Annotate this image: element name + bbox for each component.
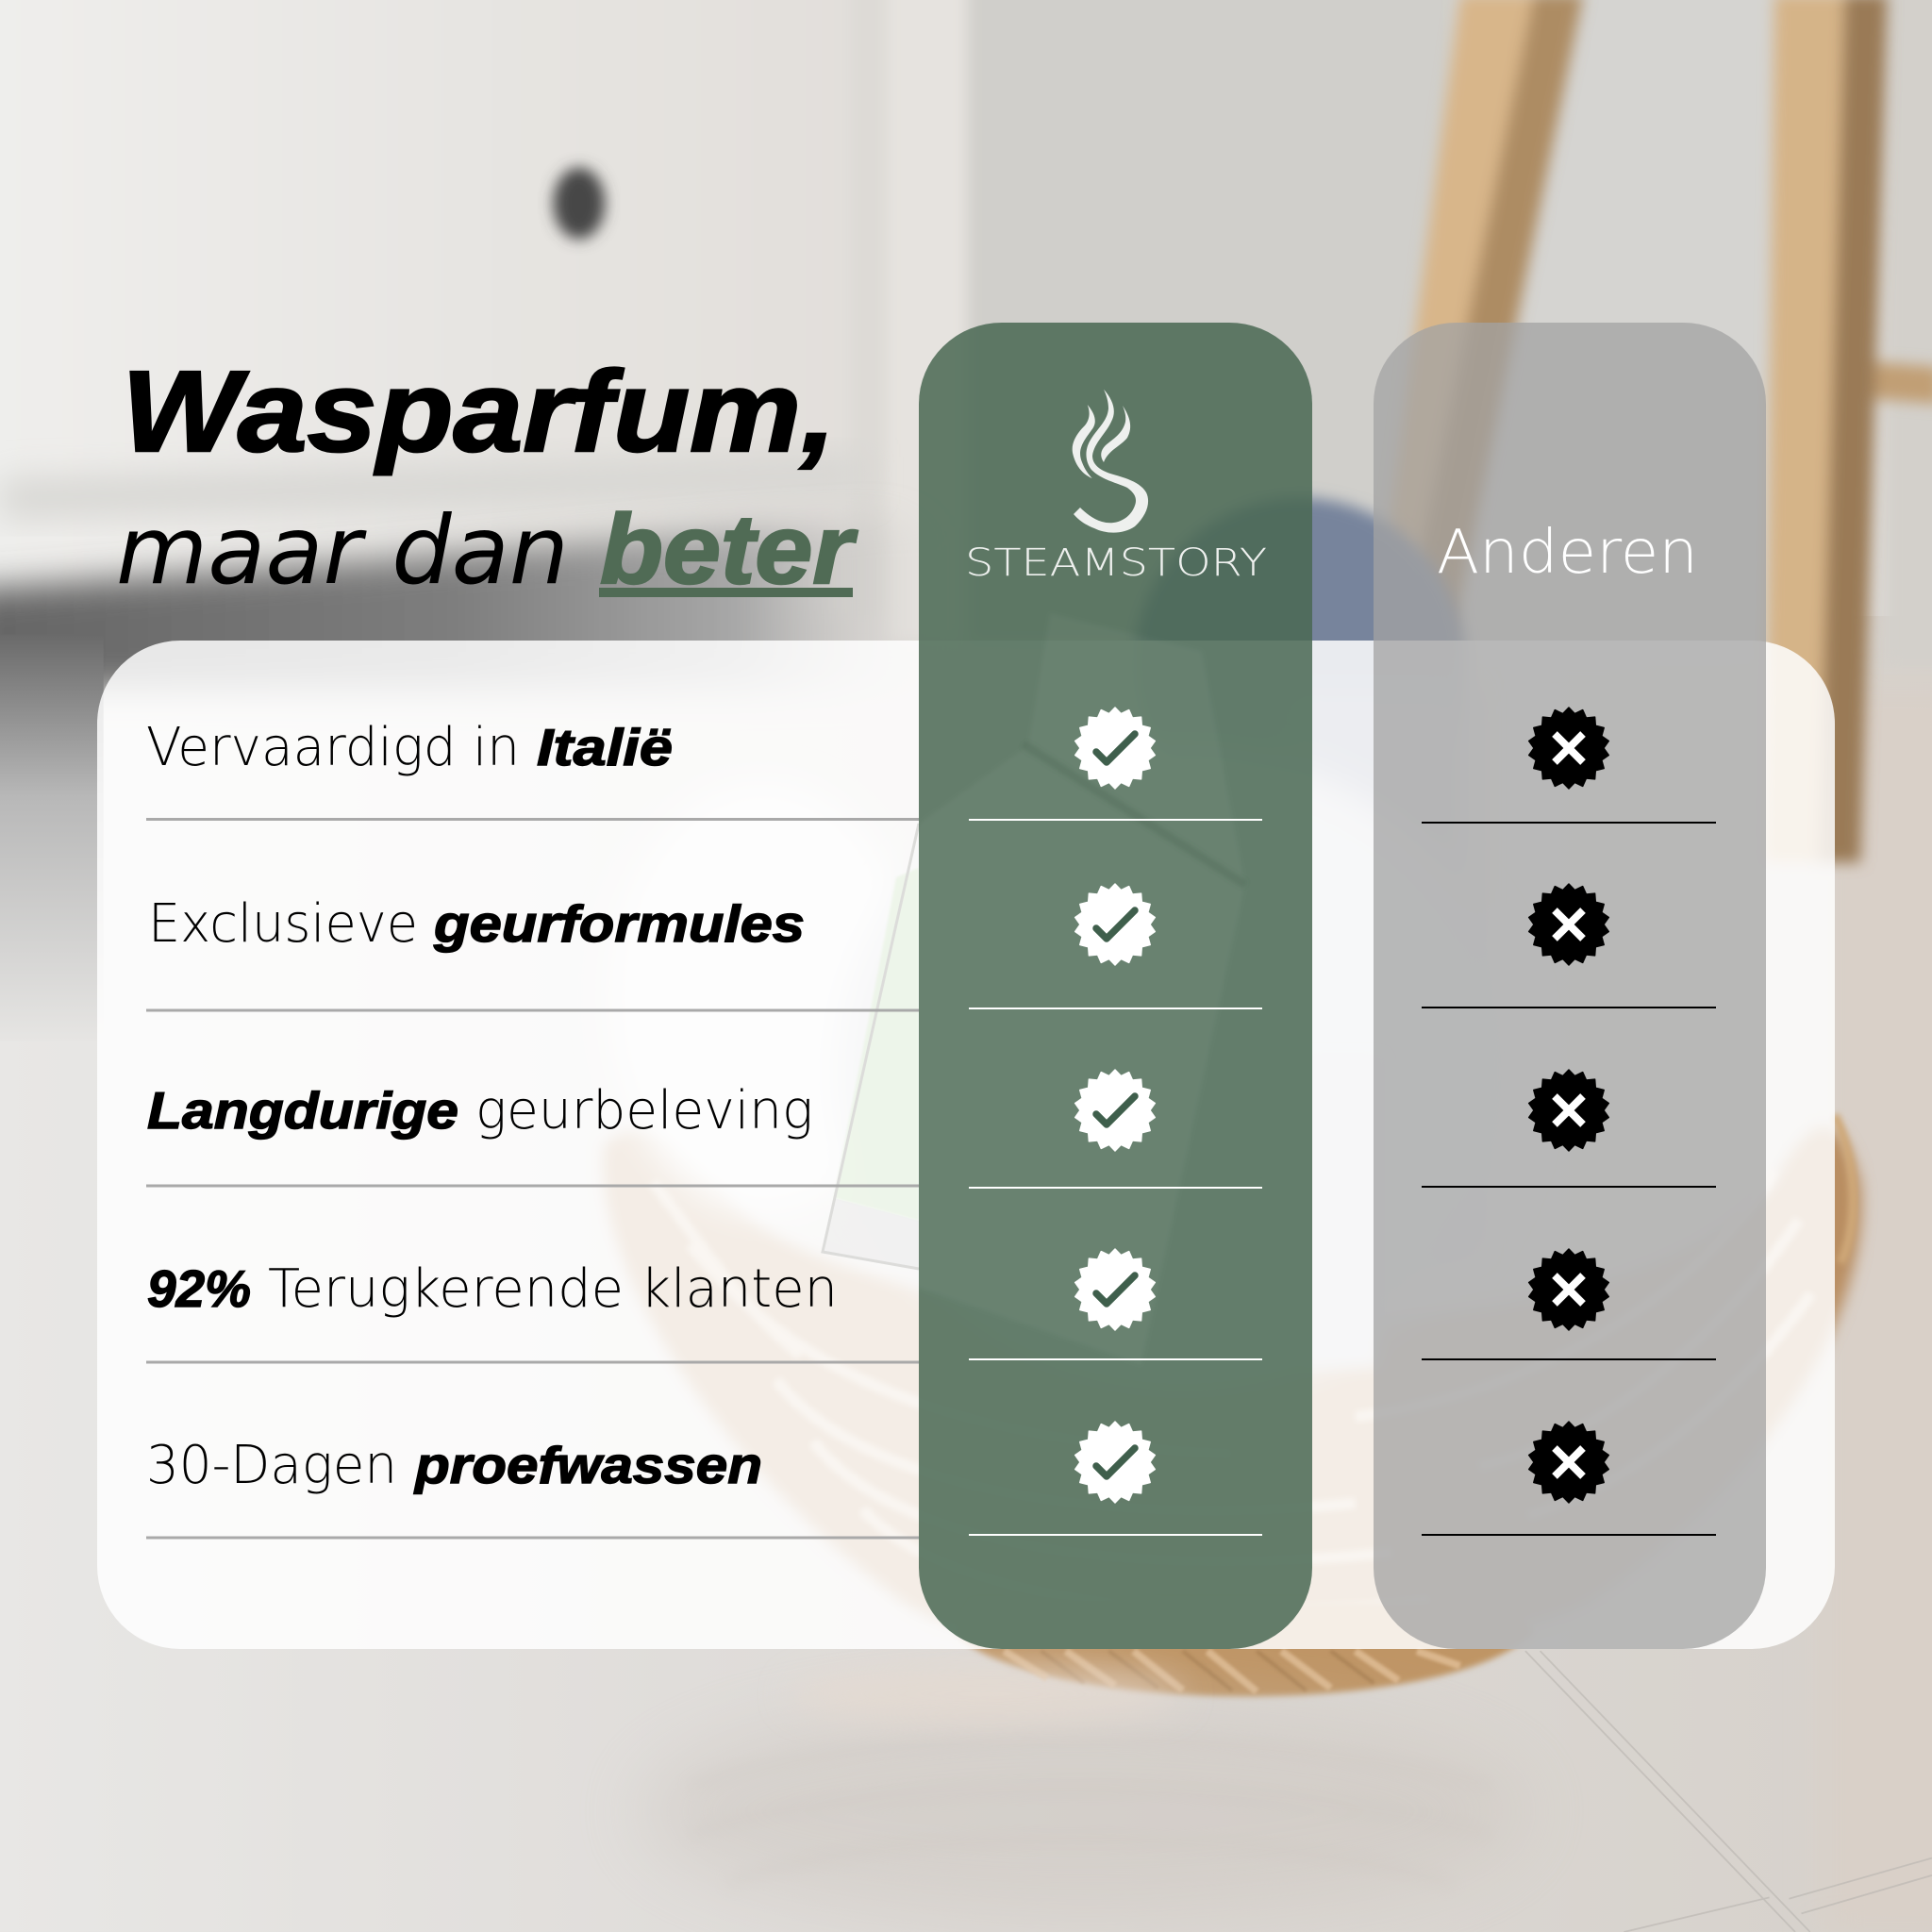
icon: cross badge row 4 xyxy=(1529,1249,1608,1330)
wood chair legs xyxy=(1368,0,1932,862)
dark shadow under drawer xyxy=(0,518,937,690)
divider row 4 xyxy=(969,1358,1262,1360)
row 3: Langdurige geurbeleving xyxy=(146,1080,919,1187)
divider row 4 xyxy=(1422,1358,1716,1360)
floor tile joints xyxy=(1525,1651,1932,1932)
divider row 1 xyxy=(1422,822,1716,824)
icon: check badge row 1 xyxy=(1075,708,1155,789)
icon: check badge row 4 xyxy=(1075,1249,1155,1330)
subtitle accent: beter: beter xyxy=(600,495,858,605)
row 2: Exclusieve geurformules: Exclusieve xyxy=(148,893,418,955)
panel: Steamstory column xyxy=(919,323,1312,1649)
icon: cross badge row 3 xyxy=(1529,1070,1608,1151)
row 3: Langdurige geurbeleving: Langdurige xyxy=(147,1081,458,1140)
row 1: Vervaardigd in Italië: Vervaardigd in xyxy=(146,717,520,778)
divider row 5 xyxy=(969,1534,1262,1536)
icon: check badge row 5 xyxy=(1075,1422,1155,1503)
title: Wasparfum: Wasparfum, xyxy=(122,347,836,475)
row 5: 30-Dagen proefwassen xyxy=(146,1435,919,1540)
bottle seen through the table panel xyxy=(823,824,919,1269)
divider row 3 xyxy=(1422,1186,1716,1188)
icon: cross badge row 1 xyxy=(1529,708,1608,789)
row 2: Exclusieve geurformules xyxy=(146,893,919,1011)
rope rim of basket xyxy=(955,1602,1534,1696)
panel: Anderen column xyxy=(1374,323,1766,1649)
divider row 5 xyxy=(1422,1534,1716,1536)
icon: check badge row 2 xyxy=(1075,884,1155,965)
icon: cross badge row 2 xyxy=(1529,884,1608,965)
icon: check badge row 3 xyxy=(1075,1070,1155,1151)
divider row 1 xyxy=(969,819,1262,821)
logo: Steamstory steam mark xyxy=(1073,390,1148,533)
row 4: 92% Terugkerende klanten: Terugkerende klanten xyxy=(268,1258,838,1320)
row 4: 92% Terugkerende klanten xyxy=(146,1258,919,1364)
column heading: Anderen: Anderen xyxy=(1437,518,1698,588)
icon: cross badge row 5 xyxy=(1529,1422,1608,1503)
panel: white comparison table xyxy=(97,641,1835,1649)
drawer knob xyxy=(553,168,605,239)
warm floor tint on the right xyxy=(1824,690,1932,1932)
column: Anderen cross badges and dividers xyxy=(1422,708,1716,1536)
divider row 2 xyxy=(969,1008,1262,1009)
basket reflection on floor xyxy=(641,1700,1528,1923)
row 1: Vervaardigd in Italië: Italië xyxy=(537,718,673,776)
logo wordmark: STEAMSTORY: STEAMSTORY xyxy=(965,541,1267,585)
divider row 3 xyxy=(969,1187,1262,1189)
column: Steamstory check badges and dividers xyxy=(969,708,1262,1536)
divider row 2 xyxy=(1422,1007,1716,1008)
row 2: Exclusieve geurformules: geurformules xyxy=(433,894,805,953)
row 5: 30-Dagen proefwassen: proefwassen xyxy=(413,1436,762,1494)
row 5: 30-Dagen proefwassen: 30-Dagen xyxy=(146,1435,397,1496)
white towel xyxy=(610,782,918,1214)
row 4: 92% Terugkerende klanten: 92% xyxy=(147,1259,251,1318)
soft drawer edge xyxy=(0,456,862,518)
row 3: Langdurige geurbeleving: geurbeleving xyxy=(475,1080,813,1141)
bottle silhouette inside Steamstory column xyxy=(823,613,1245,1365)
row 1: Vervaardigd in Italië xyxy=(146,717,919,821)
right rim of basket xyxy=(1835,1115,1853,1263)
wicker basket xyxy=(603,1127,1861,1656)
subtitle: maar dan: maar dan xyxy=(116,495,569,606)
blue towel xyxy=(1134,498,1466,833)
